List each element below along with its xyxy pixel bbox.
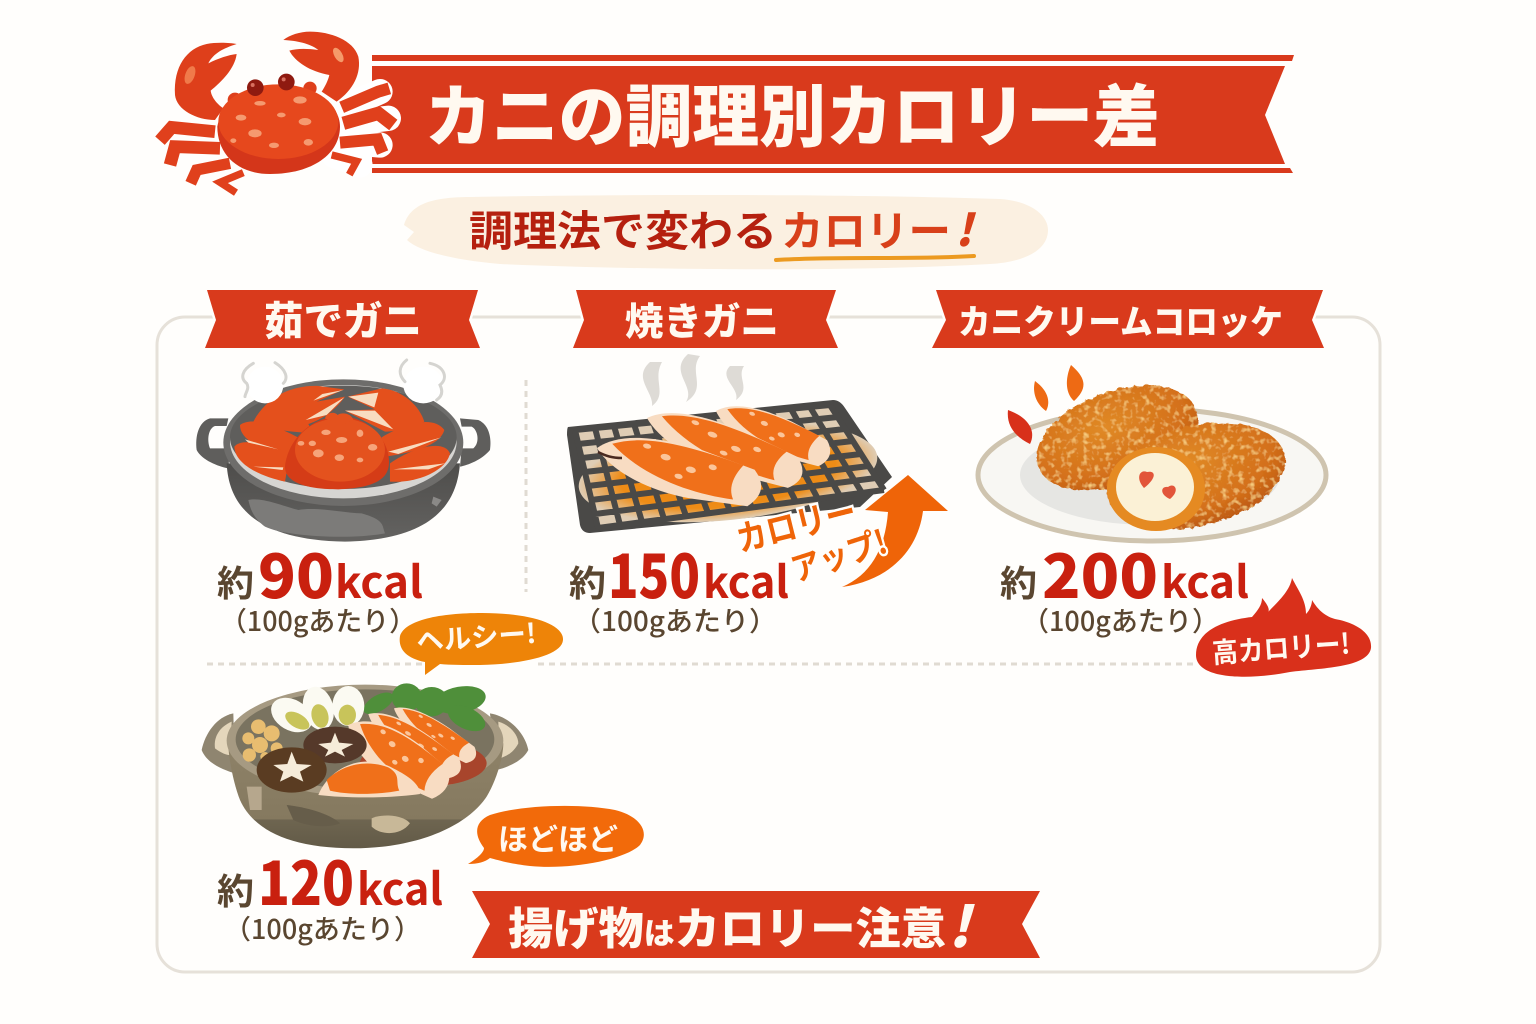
illustration: cream croquettes on plate	[978, 365, 1326, 547]
beans	[242, 719, 283, 762]
title text: カニの調理別カロリー差	[425, 62, 1160, 161]
illustration: boiled crab in pot	[196, 360, 491, 542]
illustration: hot pot nabe	[202, 682, 528, 848]
bottom banner: fried food warning: !	[948, 883, 975, 964]
callout: healthy	[400, 612, 563, 675]
greens	[360, 682, 489, 736]
kcal: 90: kcal	[335, 547, 423, 611]
grill bars	[575, 405, 884, 528]
steam	[643, 354, 744, 406]
per 100g: （100gあたり）	[573, 600, 777, 639]
rim	[227, 685, 503, 797]
kcal: 200: 200	[1042, 529, 1158, 616]
mushrooms	[303, 727, 367, 763]
kcal: 150: 150	[608, 529, 700, 616]
kcal: 90: 90	[258, 529, 334, 616]
callout: moderate: ほどほど	[498, 815, 618, 859]
callout: calorie up text: アップ!	[784, 516, 892, 592]
underline	[776, 256, 974, 260]
subtitle brush band	[404, 195, 1048, 269]
illustration: grilled crab legs on grill	[567, 354, 892, 535]
kcal: 120: kcal	[357, 854, 443, 918]
crab shell	[285, 417, 389, 489]
claw tips	[245, 390, 445, 470]
crab legs	[234, 386, 450, 482]
rim	[223, 379, 463, 506]
cut face	[1107, 447, 1205, 531]
section heading: crab cream croquette: カニクリームコロッケ	[958, 295, 1283, 344]
per 100g: （100gあたり）	[1022, 600, 1219, 639]
bottom banner: fried food warning: 揚げ物はカロリー注意	[508, 893, 946, 957]
section heading: boiled crab: 茹でガニ	[264, 289, 422, 347]
arrow: calorie up	[842, 475, 948, 587]
icon: crab	[160, 32, 393, 193]
subtitle brush band: カロリー	[781, 198, 951, 259]
eggs	[265, 683, 364, 739]
kcal: 150: kcal	[703, 547, 789, 611]
kcal: 90	[217, 529, 423, 639]
handles	[196, 418, 230, 468]
kcal: 120: 約	[217, 863, 254, 915]
subtitle brush band: !	[955, 195, 977, 259]
title banner	[372, 55, 1294, 173]
claw slit	[598, 452, 622, 458]
back croquette	[1022, 365, 1212, 511]
callout: calorie up text: カロリー	[730, 484, 861, 563]
kcal: 120: 120	[258, 836, 354, 923]
grill frame	[567, 400, 892, 533]
panel: main rounded frame	[157, 317, 1380, 972]
kcal: 150	[569, 529, 789, 639]
plate	[978, 409, 1326, 541]
crab meat	[387, 698, 482, 769]
kcal: 200: 約	[1000, 555, 1037, 607]
subtitle text: 調理法で変わる	[469, 198, 777, 259]
per 100g: （100gあたり）	[224, 908, 421, 947]
pot body	[228, 743, 503, 848]
pot body	[227, 463, 460, 542]
crab legs	[709, 394, 836, 473]
kcal: 150: 約	[569, 555, 606, 607]
steam	[247, 367, 443, 403]
handles	[202, 713, 235, 773]
hearts	[1139, 471, 1154, 488]
kcal: 120	[217, 836, 443, 947]
flames	[1008, 410, 1032, 444]
section heading: grilled crab: 焼きガニ	[625, 291, 779, 346]
front croquette	[1096, 405, 1296, 547]
section heading: boiled crab	[205, 289, 480, 348]
callout: high calorie flame	[1196, 578, 1371, 677]
kcal: 90: 約	[217, 555, 254, 607]
section heading: grilled crab	[573, 290, 838, 348]
callout: calorie up text	[730, 484, 892, 592]
bottom banner: fried food warning	[472, 883, 1040, 964]
callout: high calorie flame: 高カロリー!	[1211, 622, 1351, 672]
kcal: 200: kcal	[1161, 547, 1249, 611]
callout: moderate	[468, 806, 644, 867]
callout: healthy: ヘルシー!	[415, 612, 537, 659]
kcal: 200	[1000, 529, 1249, 639]
per 100g: （100gあたり）	[220, 600, 416, 639]
divider lines	[207, 380, 1195, 664]
